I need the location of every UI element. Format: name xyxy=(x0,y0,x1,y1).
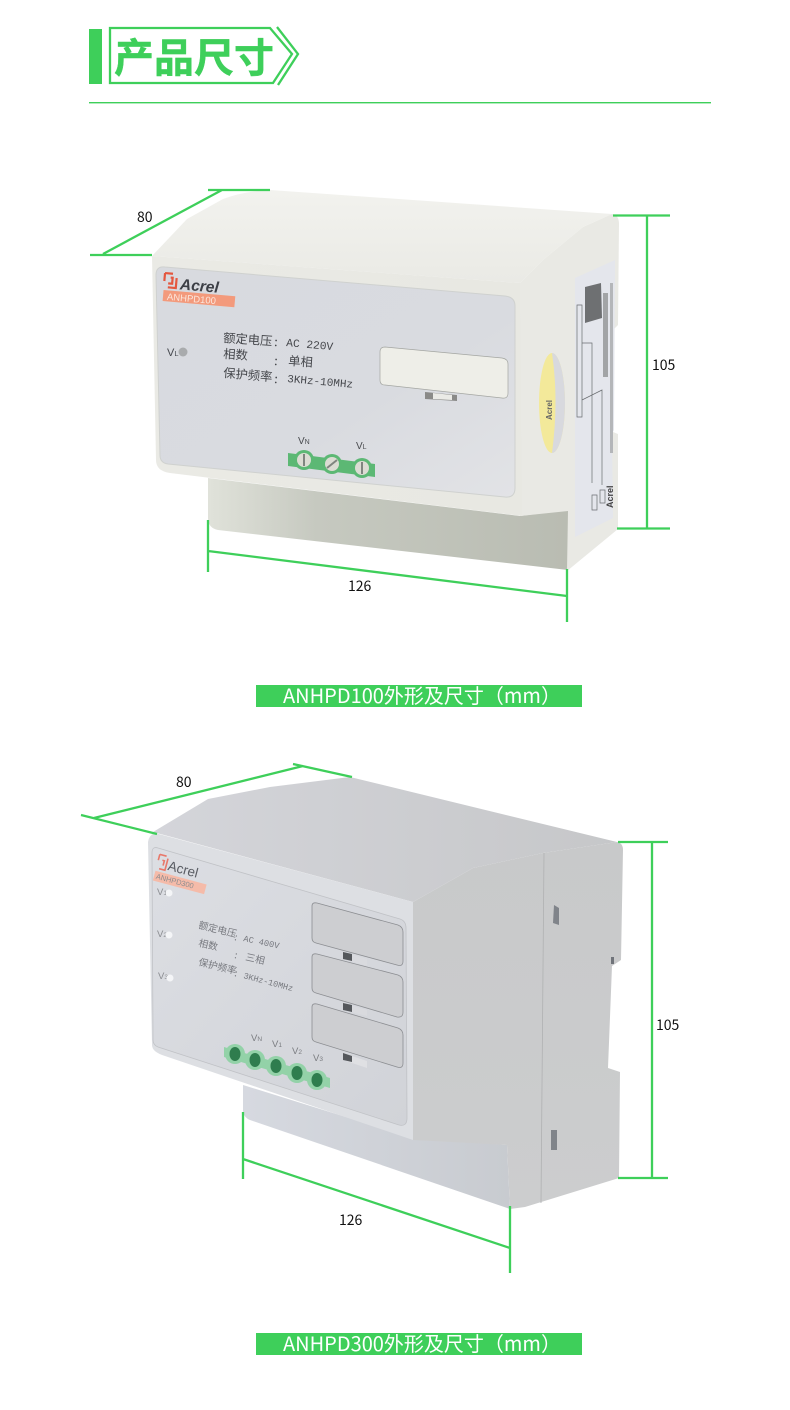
spec voltage: AC 400V xyxy=(242,934,281,952)
side seam xyxy=(541,853,544,1203)
dimension: height 105 xyxy=(613,215,676,529)
heading title: 产品尺寸 xyxy=(114,26,274,84)
spec frequency: 3KHz-10MHz xyxy=(242,971,294,994)
brand logo xyxy=(153,854,211,894)
front face xyxy=(152,256,522,516)
front inner panel xyxy=(156,267,515,497)
section heading xyxy=(89,26,298,85)
indicators V1 V2 V3: V3 xyxy=(158,971,168,982)
heading arrow frame xyxy=(110,27,298,85)
dimension: height 105: 105 xyxy=(652,355,676,375)
spec voltage: : xyxy=(274,332,278,350)
front panel specs xyxy=(197,917,294,994)
logo wordmark: Acrel xyxy=(166,858,200,881)
spec frequency: : xyxy=(233,965,239,980)
spec frequency xyxy=(197,954,294,994)
spec frequency: 保护频率 xyxy=(197,954,239,977)
spec phase: : xyxy=(274,351,278,369)
spec phase: : xyxy=(233,947,239,962)
spec phase: 相数 xyxy=(197,935,220,953)
model tag text: ANHPD300 xyxy=(155,872,195,891)
top chamfer xyxy=(152,190,612,283)
spec phase xyxy=(197,935,266,967)
model tag xyxy=(163,290,235,307)
dimension: width 126 xyxy=(208,520,567,622)
dimension: width 126: 126 xyxy=(339,1210,363,1230)
spec frequency xyxy=(223,363,353,392)
spec frequency: 3KHz-10MHz xyxy=(287,374,353,392)
spec phase: 相数 xyxy=(223,344,249,364)
side label xyxy=(575,260,615,537)
indicators V1 V2 V3 xyxy=(157,887,174,982)
indicators V1 V2 V3: V2 xyxy=(157,929,167,940)
front face xyxy=(148,833,413,1140)
terminal block: VN xyxy=(251,1033,262,1044)
spec phase xyxy=(223,344,314,371)
clip slot lower xyxy=(551,1130,557,1150)
spec voltage: AC 220V xyxy=(286,338,334,354)
logo wordmark: Acrel xyxy=(178,276,220,297)
dimension: width 126 xyxy=(243,1112,510,1273)
terminal block xyxy=(288,436,375,478)
terminal block: V2 xyxy=(292,1046,302,1057)
front inner panel xyxy=(152,848,407,1125)
warranty sticker xyxy=(539,353,565,453)
module windows xyxy=(312,903,403,1068)
terminal block: V1 xyxy=(272,1039,282,1050)
spec phase: 单相 xyxy=(288,351,314,371)
spec voltage xyxy=(223,328,334,354)
top chamfer xyxy=(153,777,617,902)
spec voltage: : xyxy=(233,929,239,944)
dimension: depth 80 xyxy=(81,764,352,834)
warranty sticker: Acrel xyxy=(545,400,554,420)
indicator VL xyxy=(167,347,188,359)
dimension: height 105 xyxy=(618,842,680,1178)
spec phase: 三相 xyxy=(244,949,266,967)
caption banner: ANHPD100: ANHPD100外形及尺寸（mm） xyxy=(283,680,561,709)
caption banner: ANHPD300: ANHPD300外形及尺寸（mm） xyxy=(283,1328,561,1357)
dimension: depth 80: 80 xyxy=(176,772,192,792)
dimension: depth 80: 80 xyxy=(137,207,153,227)
terminal block: VN xyxy=(298,436,310,447)
model tag xyxy=(153,871,207,894)
dimension: depth 80 xyxy=(90,190,270,255)
base xyxy=(208,478,568,570)
window notches xyxy=(343,952,367,1068)
spec voltage: 额定电压 xyxy=(197,917,239,940)
terminal block: VL xyxy=(356,441,367,452)
indicators V1 V2 V3: V1 xyxy=(157,887,167,898)
indicator VL: VL xyxy=(167,347,179,359)
module window xyxy=(380,347,508,401)
model tag text: ANHPD100 xyxy=(166,292,216,307)
logo mark xyxy=(164,273,177,288)
spec voltage xyxy=(197,917,281,952)
brand logo xyxy=(162,273,237,309)
dimension: width 126: 126 xyxy=(348,576,372,596)
spec frequency: : xyxy=(274,369,279,387)
clip slot upper xyxy=(553,905,559,925)
side body xyxy=(520,214,619,571)
product photo: ANHPD100 xyxy=(152,190,619,571)
base xyxy=(243,1085,510,1209)
dimension: height 105: 105 xyxy=(656,1015,680,1035)
logo mark xyxy=(156,854,169,870)
terminal block xyxy=(224,1033,330,1090)
terminal block: V3 xyxy=(313,1053,323,1064)
product photo: ANHPD300 xyxy=(148,777,623,1209)
spec frequency: 保护频率 xyxy=(223,363,273,385)
front panel specs xyxy=(223,328,353,392)
side label: Acrel xyxy=(605,485,615,508)
spec voltage: 额定电压 xyxy=(223,328,273,349)
rail clip xyxy=(611,957,614,964)
side body xyxy=(413,842,623,1209)
heading accent bar xyxy=(89,29,102,84)
